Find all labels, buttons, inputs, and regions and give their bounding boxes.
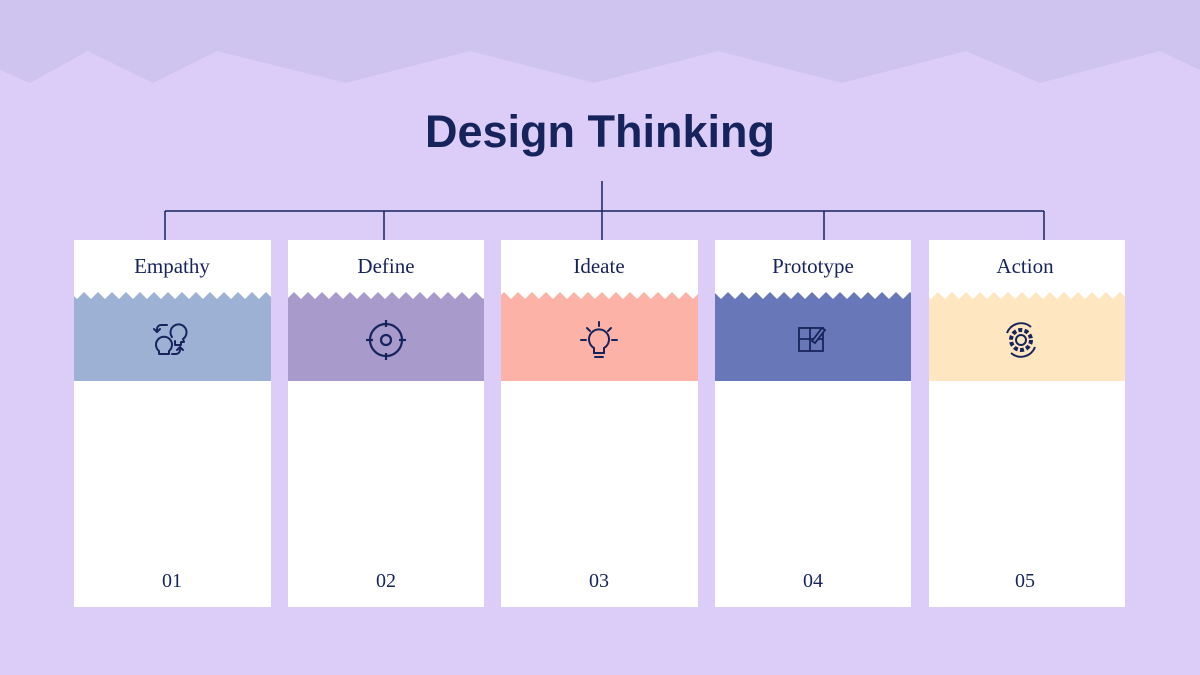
card: Ideate: 03 [589, 570, 609, 592]
card: Prototype: Prototype [772, 254, 854, 278]
card: Define: 02 [376, 570, 396, 592]
card: Define: Define [357, 254, 415, 278]
card: Empathy: 01 [162, 570, 182, 592]
card: Action: 05 [1015, 570, 1035, 592]
icon: target [366, 320, 406, 360]
icon: gear cycle [1007, 323, 1035, 357]
connector tree [165, 181, 1044, 240]
card: Ideate: Ideate [573, 254, 625, 278]
card: Prototype [715, 240, 911, 607]
card: Ideate [501, 240, 698, 607]
title: Design Thinking [425, 106, 775, 157]
card: Action [929, 240, 1125, 607]
card: Action: Action [996, 254, 1054, 278]
card: Empathy: Empathy [134, 254, 210, 278]
card: Define [288, 240, 484, 607]
icon: sketch frame [799, 328, 825, 351]
icon: light bulb [581, 322, 617, 357]
card: Empathy [74, 240, 271, 607]
icon: heads exchange [154, 324, 187, 354]
card: Prototype: 04 [803, 570, 823, 592]
